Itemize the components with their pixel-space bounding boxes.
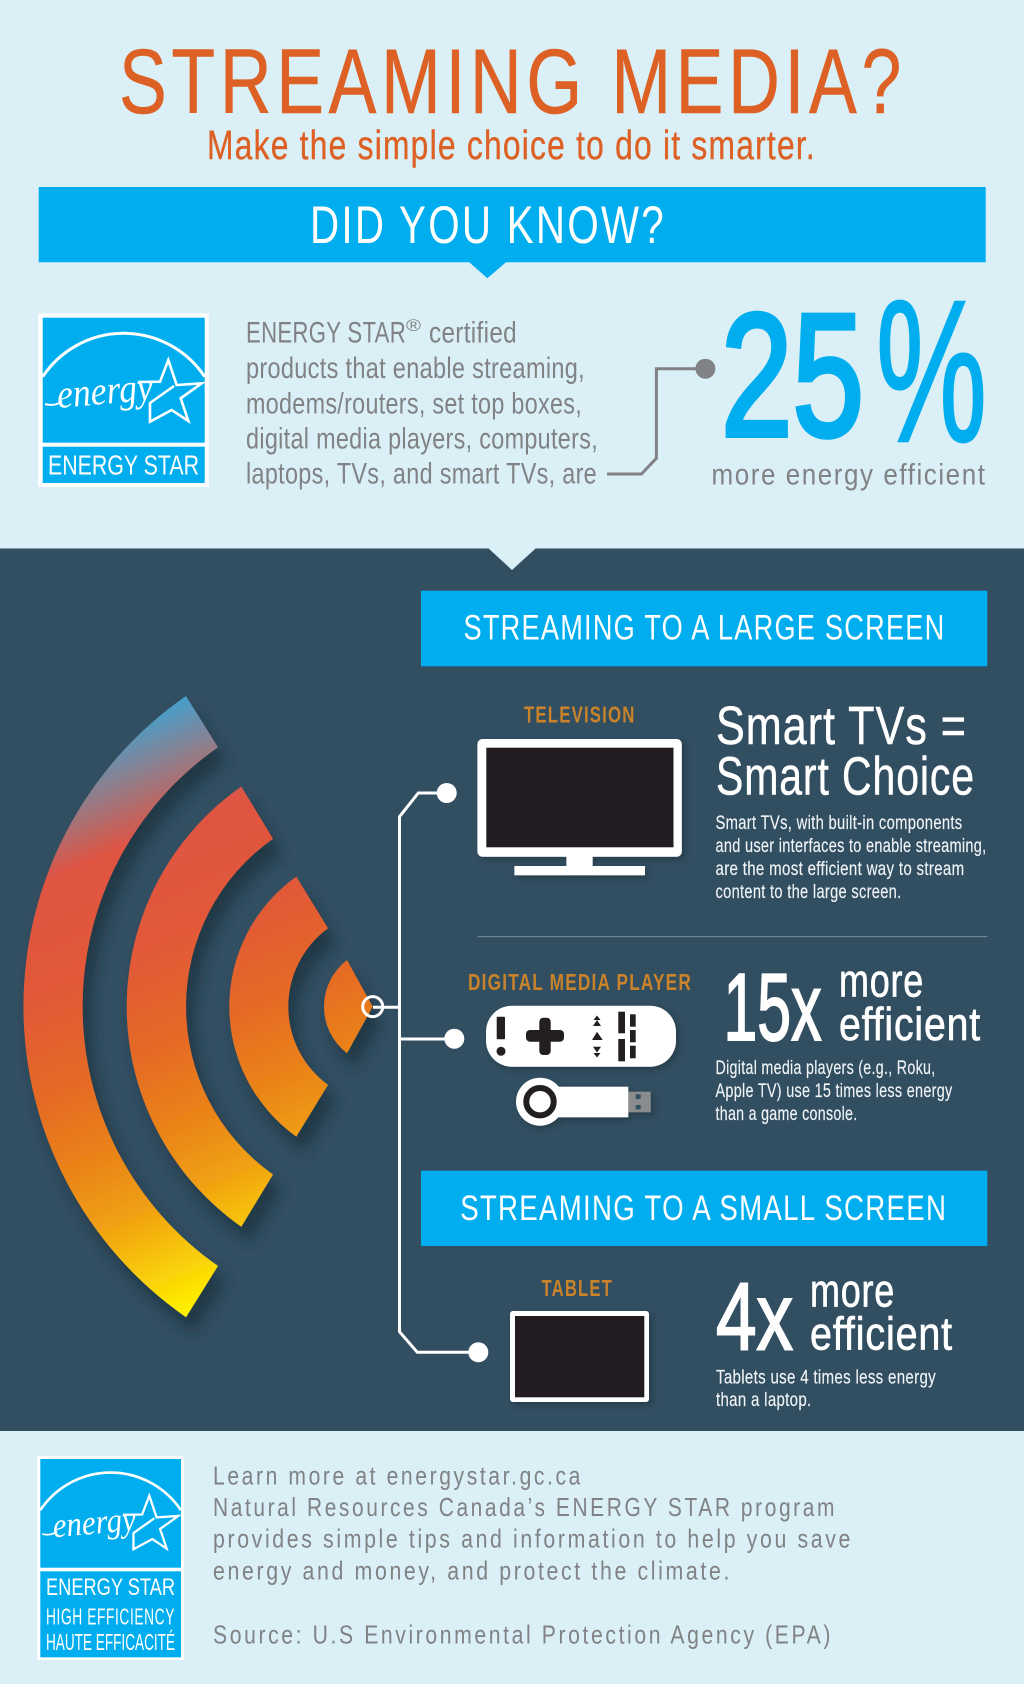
text block: certified products: products that enable streaming, bbox=[246, 352, 585, 385]
text block: tablets: Tablets use 4 times less energy bbox=[716, 1366, 936, 1388]
stat: 25 percent: 25 bbox=[721, 278, 864, 474]
stat: 15x more efficient: 15x bbox=[724, 954, 822, 1061]
text block: certified products: ENERGY STAR bbox=[246, 317, 406, 350]
label: television: TELEVISION bbox=[524, 702, 636, 728]
logo wordmark: ENERGY STAR bbox=[46, 1574, 175, 1601]
text block: certified products: certified bbox=[429, 317, 517, 350]
source line: Source: U.S Environmental Protection Agency (EPA) bbox=[213, 1619, 833, 1649]
logo wordmark: ENERGY STAR bbox=[48, 449, 199, 480]
header bbox=[119, 31, 906, 168]
text block: footer bbox=[213, 1460, 853, 1649]
logo french line: HAUTE EFFICACITÉ bbox=[46, 1629, 175, 1655]
text block: tablets: than a laptop. bbox=[716, 1389, 812, 1411]
icon: tablet bbox=[510, 1311, 649, 1402]
stat caption: more energy efficient bbox=[712, 458, 986, 491]
icon: signal waves bbox=[23, 696, 373, 1317]
stat: 15x more efficient: more bbox=[839, 955, 924, 1007]
heading: smart tvs: Smart TVs = bbox=[716, 696, 967, 756]
logo mark: energy bbox=[51, 1499, 138, 1545]
banner heading: DID YOU KNOW? bbox=[310, 196, 666, 255]
stat: 25 percent bbox=[712, 258, 987, 491]
text block: certified products: ® bbox=[406, 316, 422, 335]
text block: certified products: laptops, TVs, and smart TVs, are bbox=[246, 458, 597, 490]
label: tablet: TABLET bbox=[542, 1275, 613, 1301]
logo arc bbox=[43, 333, 205, 377]
logo: energy star bbox=[38, 313, 209, 487]
icon: usb stick bbox=[516, 1078, 651, 1126]
logo mark bbox=[40, 1473, 181, 1549]
text block: smart tvs bbox=[716, 812, 986, 903]
text block: smart tvs: content to the large screen. bbox=[716, 881, 902, 903]
stat: 15x more efficient: efficient bbox=[839, 998, 981, 1050]
subtitle: Make the simple choice to do it smarter. bbox=[207, 122, 816, 168]
text block: footer: energy and money, and protect the climate. bbox=[213, 1555, 732, 1585]
text block: footer: Learn more at energystar.gc.ca bbox=[213, 1460, 583, 1490]
stat: 15x more efficient bbox=[724, 954, 981, 1061]
stat: 4x more efficient bbox=[716, 1263, 953, 1370]
stat: 4x more efficient: more bbox=[810, 1265, 895, 1317]
connector lines bbox=[363, 783, 488, 1362]
logo: energy star high efficiency bbox=[37, 1456, 184, 1660]
text block: certified products bbox=[246, 316, 598, 490]
text block: footer: Natural Resources Canada’s ENERGY STAR program bbox=[213, 1492, 837, 1522]
text block: footer: provides simple tips and information to help you save bbox=[213, 1524, 853, 1554]
panel: streaming section bbox=[0, 548, 1024, 1431]
label: digital media player: DIGITAL MEDIA PLAYER bbox=[468, 969, 692, 995]
banner: small screen bbox=[421, 1171, 987, 1246]
text block: certified products: digital media players, computers, bbox=[246, 422, 598, 455]
banner: large screen bbox=[421, 591, 987, 666]
text block: digital media players: Digital media players (e.g., Roku, bbox=[716, 1057, 936, 1079]
logo english line: HIGH EFFICIENCY bbox=[46, 1603, 175, 1629]
text block: digital media players: than a game console. bbox=[716, 1103, 858, 1125]
stat: 4x more efficient: efficient bbox=[810, 1307, 953, 1359]
icon: television bbox=[477, 739, 682, 875]
arrow: connector to 25% bbox=[607, 359, 715, 474]
icon: remote control bbox=[486, 1006, 676, 1067]
text block: tablets bbox=[716, 1366, 936, 1411]
stat: 4x more efficient: 4x bbox=[716, 1263, 793, 1370]
heading: smart tvs bbox=[716, 696, 975, 806]
logo script: energy bbox=[55, 364, 155, 417]
text block: digital media players bbox=[716, 1057, 952, 1125]
banner: did you know bbox=[39, 187, 986, 278]
text block: certified products: modems/routers, set top boxes, bbox=[246, 387, 582, 420]
logo star bbox=[138, 360, 202, 422]
